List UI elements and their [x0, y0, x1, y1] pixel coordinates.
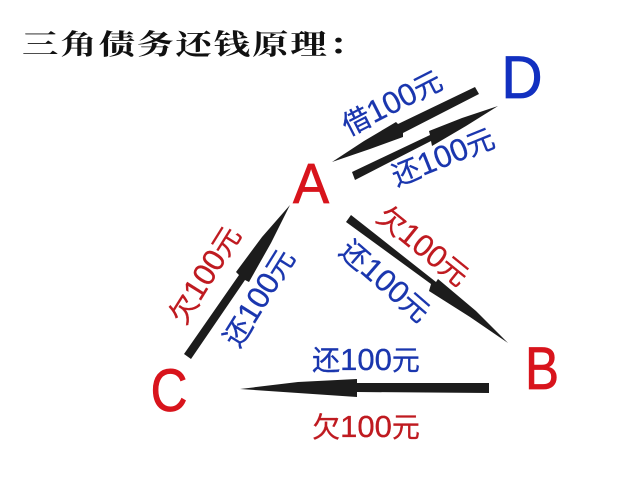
arrow: C to A: [184, 205, 290, 359]
arrow: A to D: [352, 106, 498, 180]
label: repay 100 on BC: 还100元: [312, 342, 420, 377]
node C: C: [151, 357, 187, 424]
arrow: A to B: [346, 215, 508, 343]
label: owes 100 on CA: 欠100元: [161, 220, 248, 330]
label: repay 100 on CA: 还100元: [215, 243, 302, 353]
label: owes 100 on AB: 欠100元: [370, 198, 476, 293]
label: repay 100 on AB: 还100元: [333, 232, 437, 329]
label: borrow 100 from D: 借100元: [336, 62, 448, 143]
arrow: B to C: [240, 379, 489, 397]
node D: D: [501, 45, 543, 111]
label: owes 100 on BC: 欠100元: [312, 409, 420, 444]
label: repay 100 to D: 还100元: [386, 120, 499, 193]
arrow: D to A: [332, 87, 479, 162]
title: 三角债务还钱原理：: [22, 29, 367, 61]
node A: A: [293, 152, 329, 215]
node B: B: [525, 335, 559, 402]
